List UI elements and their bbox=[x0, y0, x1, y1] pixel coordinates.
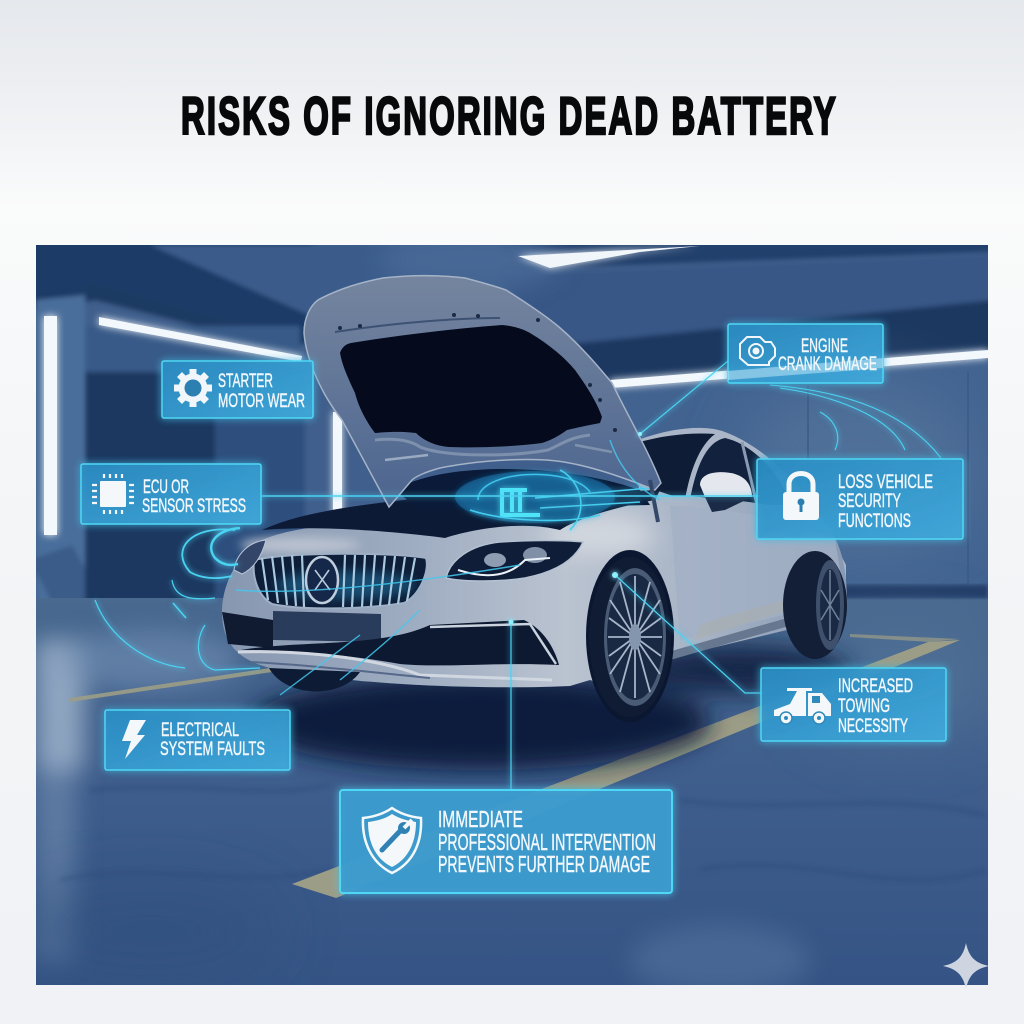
icon: sparkle watermark bbox=[943, 943, 989, 989]
label: immediate professional intervention prevents further damage: PREVENTS FURTHER DAMAGE bbox=[438, 851, 650, 877]
floor bbox=[36, 598, 988, 985]
door sill bbox=[672, 619, 786, 660]
left headlight bbox=[234, 540, 266, 574]
icon: gear bbox=[174, 369, 212, 407]
centre intake bbox=[241, 620, 559, 665]
label: increased towing necessity: TOWING bbox=[838, 695, 890, 717]
icon: tow truck bbox=[774, 688, 831, 724]
label: loss vehicle security functions: FUNCTIONS bbox=[838, 510, 911, 532]
label: engine crank damage: CRANK DAMAGE bbox=[778, 353, 877, 375]
label: ecu or sensor stress: SENSOR STRESS bbox=[142, 495, 246, 517]
icon: padlock bbox=[783, 474, 819, 520]
blue energy streaks on car bbox=[236, 440, 660, 695]
glowing battery bbox=[455, 470, 650, 530]
right headlight bbox=[446, 540, 583, 581]
label: immediate professional intervention prevents further damage: IMMEDIATE bbox=[438, 806, 523, 832]
label: starter motor wear: MOTOR WEAR bbox=[218, 390, 305, 412]
panel: loss vehicle security functions bbox=[757, 459, 963, 539]
wall panel joints bbox=[808, 372, 968, 585]
panel: engine crank damage bbox=[728, 324, 883, 383]
label: electrical system faults: ELECTRICAL bbox=[161, 719, 239, 741]
floor reflections bbox=[36, 630, 240, 960]
panel: increased towing necessity bbox=[761, 668, 946, 741]
label: loss vehicle security functions bbox=[838, 471, 933, 532]
roof and cabin bbox=[638, 428, 846, 640]
label: increased towing necessity: INCREASED bbox=[838, 675, 913, 697]
front wheel arch bbox=[586, 550, 674, 722]
side windows bbox=[689, 438, 792, 505]
label: electrical system faults: SYSTEM FAULTS bbox=[160, 738, 265, 760]
label: engine crank damage: ENGINE bbox=[801, 335, 848, 357]
icon: engine bbox=[740, 337, 775, 365]
car bbox=[222, 276, 847, 722]
car body bbox=[222, 495, 847, 687]
icon: shield with wrench bbox=[363, 808, 421, 873]
floor stripes bbox=[70, 634, 960, 898]
panel: garage scene bbox=[20, 230, 1000, 995]
front wheel bbox=[604, 568, 666, 706]
label: increased towing necessity bbox=[838, 675, 913, 737]
engine bay bbox=[262, 490, 660, 538]
panel: electrical system faults bbox=[105, 710, 290, 770]
connector end dots bbox=[508, 432, 642, 624]
label: ecu or sensor stress bbox=[142, 476, 246, 517]
label: electrical system faults bbox=[160, 719, 265, 760]
icon: lightning bolt bbox=[122, 720, 146, 759]
label: starter motor wear bbox=[218, 370, 305, 412]
license plate bbox=[273, 611, 381, 642]
connector lines and swirl arcs bbox=[95, 361, 941, 790]
icon: chip bbox=[92, 474, 134, 514]
label: increased towing necessity: NECESSITY bbox=[838, 715, 908, 737]
hood strut bbox=[650, 480, 658, 522]
panel: ecu or sensor stress bbox=[81, 464, 261, 524]
panel: starter motor wear bbox=[162, 361, 313, 418]
open hood bbox=[304, 276, 661, 507]
label: ecu or sensor stress: ECU OR bbox=[143, 476, 189, 498]
ceiling light bbox=[518, 246, 700, 268]
light bars bbox=[44, 316, 988, 535]
label: loss vehicle security functions: LOSS VEHICLE bbox=[838, 471, 933, 493]
label: starter motor wear: STARTER bbox=[218, 370, 273, 392]
side mirror bbox=[700, 472, 752, 512]
front lip bbox=[238, 652, 552, 680]
label: engine crank damage bbox=[778, 335, 877, 375]
hood liner opening bbox=[340, 325, 602, 447]
grille bbox=[254, 554, 427, 608]
hood ribs and bolts bbox=[375, 435, 590, 455]
left intake bbox=[222, 612, 273, 648]
label: immediate professional intervention prevents further damage bbox=[438, 806, 656, 877]
label: immediate professional intervention prevents further damage: PROFESSIONAL INTERVENTION bbox=[438, 829, 656, 855]
title: RISKS OF IGNORING DEAD BATTERY bbox=[181, 87, 836, 146]
label: loss vehicle security functions: SECURITY bbox=[838, 490, 901, 512]
car shadow bbox=[250, 646, 850, 770]
door panel bbox=[771, 540, 840, 618]
grille logo bbox=[306, 557, 338, 603]
front-left wheel bbox=[269, 668, 360, 691]
panel: immediate professional intervention callout bbox=[340, 790, 672, 893]
fender highlight bbox=[545, 515, 655, 555]
rear wheel bbox=[783, 551, 847, 659]
garage walls and ceiling bbox=[30, 240, 994, 620]
